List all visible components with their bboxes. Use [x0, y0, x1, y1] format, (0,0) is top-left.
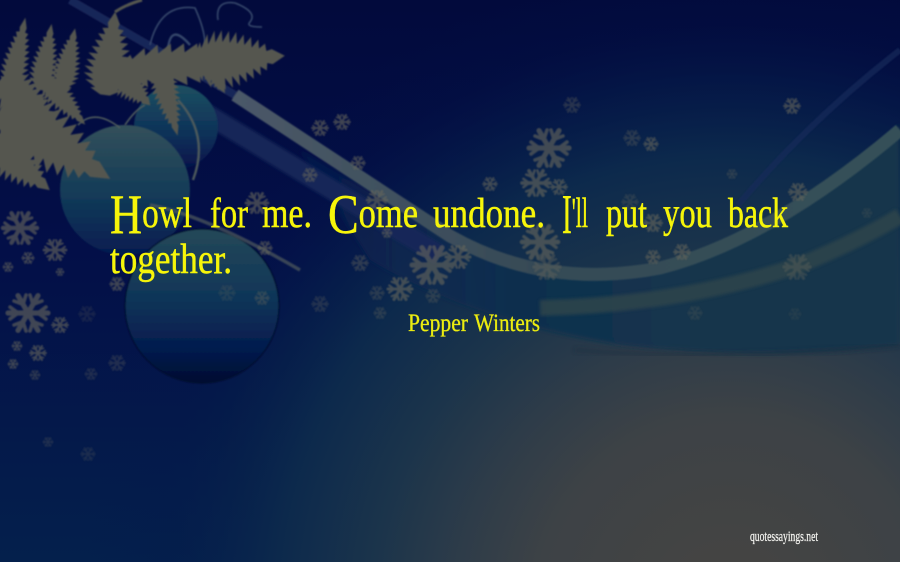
ornament: large lower bauble [125, 229, 279, 383]
dim band below ribbon [200, 110, 440, 255]
quote text: you [663, 191, 712, 237]
dark swoosh edge [575, 345, 900, 355]
author name [408, 310, 540, 337]
lower ribbon [540, 216, 900, 308]
quote text: me. [262, 191, 312, 237]
quote text: together. [110, 237, 232, 283]
ornament: upper bauble [134, 85, 218, 169]
ornament ribbons [78, 0, 300, 270]
quote text: back [728, 191, 788, 237]
quote text: H [110, 184, 142, 246]
quote text: for [210, 191, 248, 237]
quote text: 'll [572, 191, 588, 237]
snowflakes [3, 98, 872, 460]
quote text: ome [359, 191, 418, 237]
quote text: C [328, 184, 359, 246]
fern [0, 9, 287, 209]
quote text: put [606, 191, 647, 237]
quote text: owl [142, 191, 192, 237]
teal swoosh area [300, 125, 900, 354]
upper diagonal ribbon [70, 0, 900, 274]
watermark: quotessayings.net [750, 529, 819, 545]
quote text: undone. [433, 191, 545, 237]
author name: Pepper [408, 310, 469, 337]
quote text [110, 184, 788, 283]
faint blue streak [738, 50, 900, 205]
quote text: I [562, 184, 572, 246]
ornament: left bauble [60, 125, 190, 255]
author name: Winters [474, 310, 540, 337]
